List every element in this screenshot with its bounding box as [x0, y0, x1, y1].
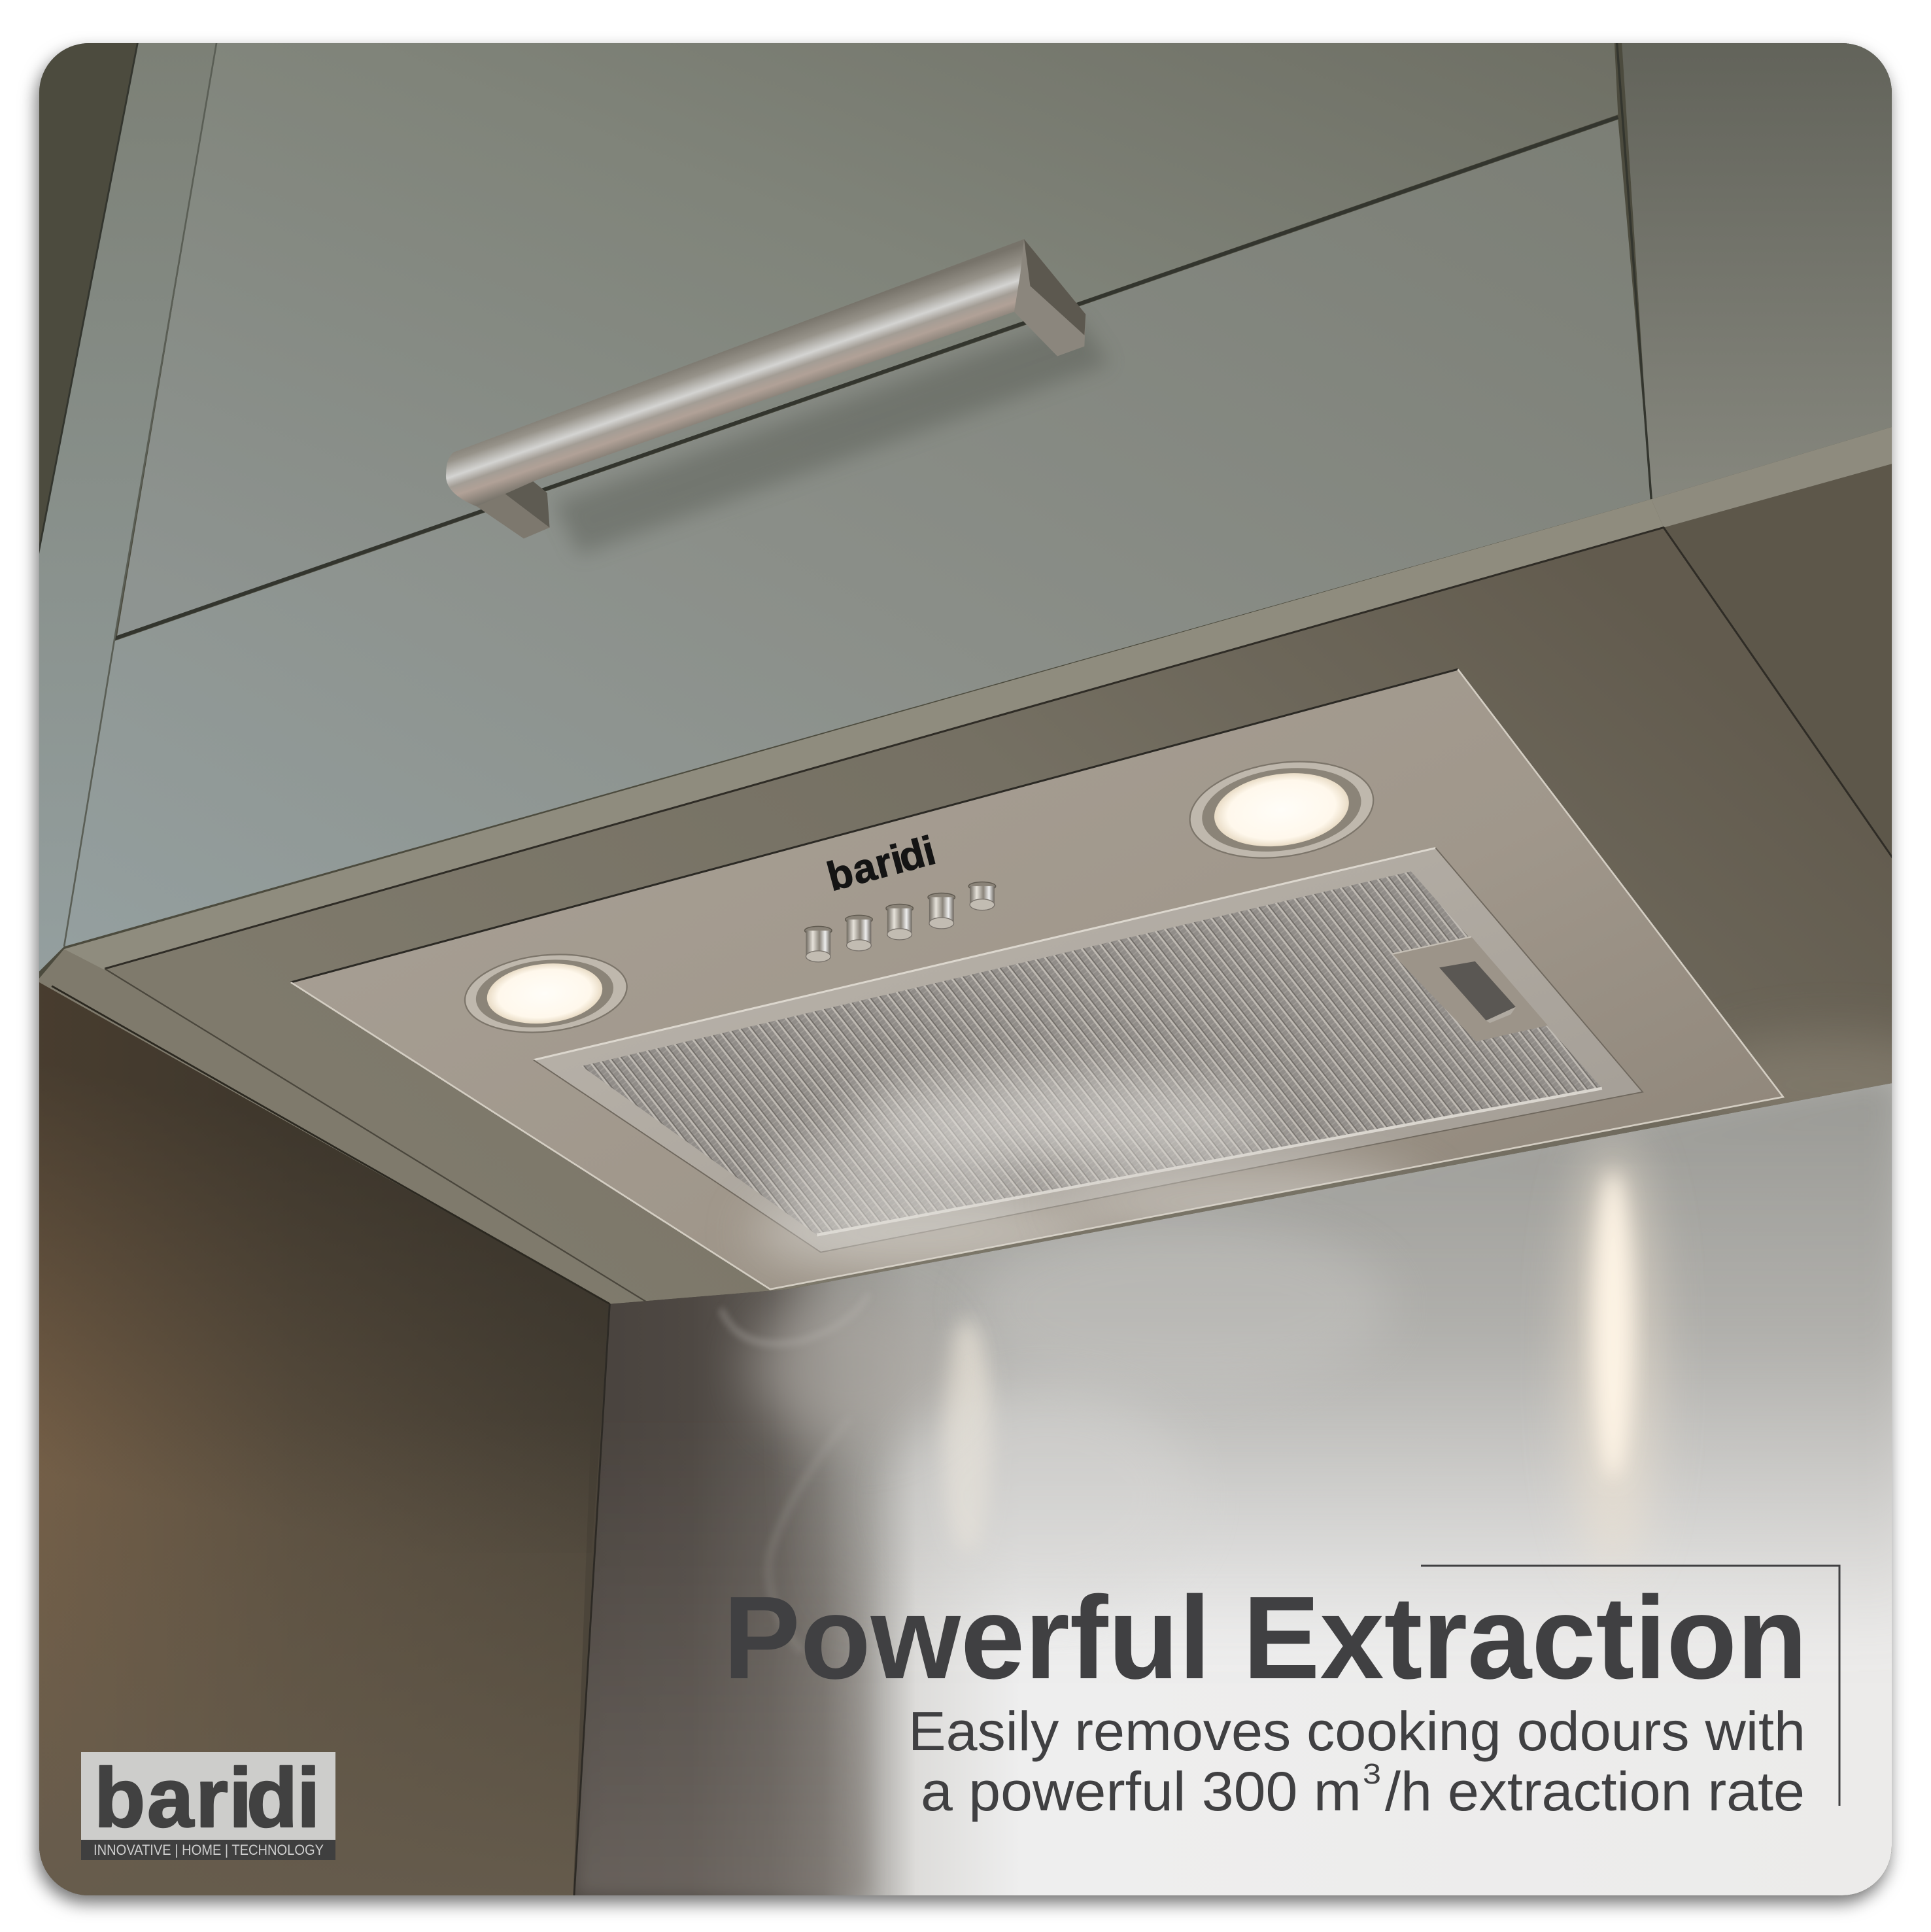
filter haze — [581, 871, 1602, 1235]
right bracket — [1014, 239, 1085, 356]
description — [908, 1700, 1805, 1822]
handle bar — [446, 239, 1024, 507]
left post — [477, 481, 549, 539]
logo wordmark: baridi — [94, 1751, 320, 1845]
control buttons — [805, 882, 996, 962]
wall highlights — [943, 1140, 1655, 1572]
frame inner lip — [817, 1088, 1602, 1235]
button 1 — [805, 926, 832, 962]
upper door panel — [117, 41, 1618, 636]
description line 2: a powerful 300 m — [921, 1761, 1361, 1822]
right light — [1184, 751, 1380, 869]
left wall — [37, 981, 610, 1898]
steam on hood — [752, 1160, 1429, 1275]
hood logo: baridi — [823, 828, 940, 900]
vent tab — [1392, 937, 1548, 1041]
handle shadow — [555, 318, 1109, 555]
description line 1: Easily removes cooking odours with — [908, 1700, 1805, 1762]
underside light patch — [1688, 1035, 1931, 1134]
button 5 — [968, 882, 996, 910]
steam on filter — [764, 1075, 1269, 1208]
title: Powerful Extraction — [723, 1572, 1807, 1704]
text bracket — [1421, 1566, 1839, 1806]
cabinet underside — [37, 425, 1931, 1305]
vent slot — [1439, 961, 1516, 1020]
left wall corner shade — [37, 981, 610, 1553]
right cabinet — [1622, 41, 1898, 499]
right underside shade — [1664, 462, 1898, 863]
right cabinet lower band — [1651, 425, 1898, 528]
tagline: INNOVATIVE | HOME | TECHNOLOGY — [94, 1842, 324, 1858]
logo background — [81, 1752, 335, 1840]
door gap lines — [37, 41, 1651, 946]
mesh filter — [581, 871, 1602, 1235]
button 2 — [846, 915, 872, 951]
steam — [721, 1220, 1392, 1651]
top shade — [813, 1048, 1922, 1676]
filter frame — [534, 848, 1643, 1252]
superscript: 3 — [1363, 1758, 1381, 1790]
tagline bar — [81, 1840, 335, 1860]
door handle — [446, 239, 1085, 539]
baridi logo badge — [81, 1751, 335, 1860]
lower left wall lift — [573, 1417, 869, 1898]
back wall — [573, 1048, 1922, 1898]
left light — [461, 947, 631, 1040]
left wall lower tone — [37, 1417, 592, 1898]
underside front lip — [64, 499, 1664, 970]
button 4 — [928, 893, 955, 929]
hood panel — [291, 669, 1783, 1289]
button 3 — [886, 904, 913, 940]
lower door panel — [64, 120, 1651, 946]
left cabinet side strip — [37, 41, 217, 974]
description line 2 end: /h extraction rate — [1385, 1761, 1805, 1822]
